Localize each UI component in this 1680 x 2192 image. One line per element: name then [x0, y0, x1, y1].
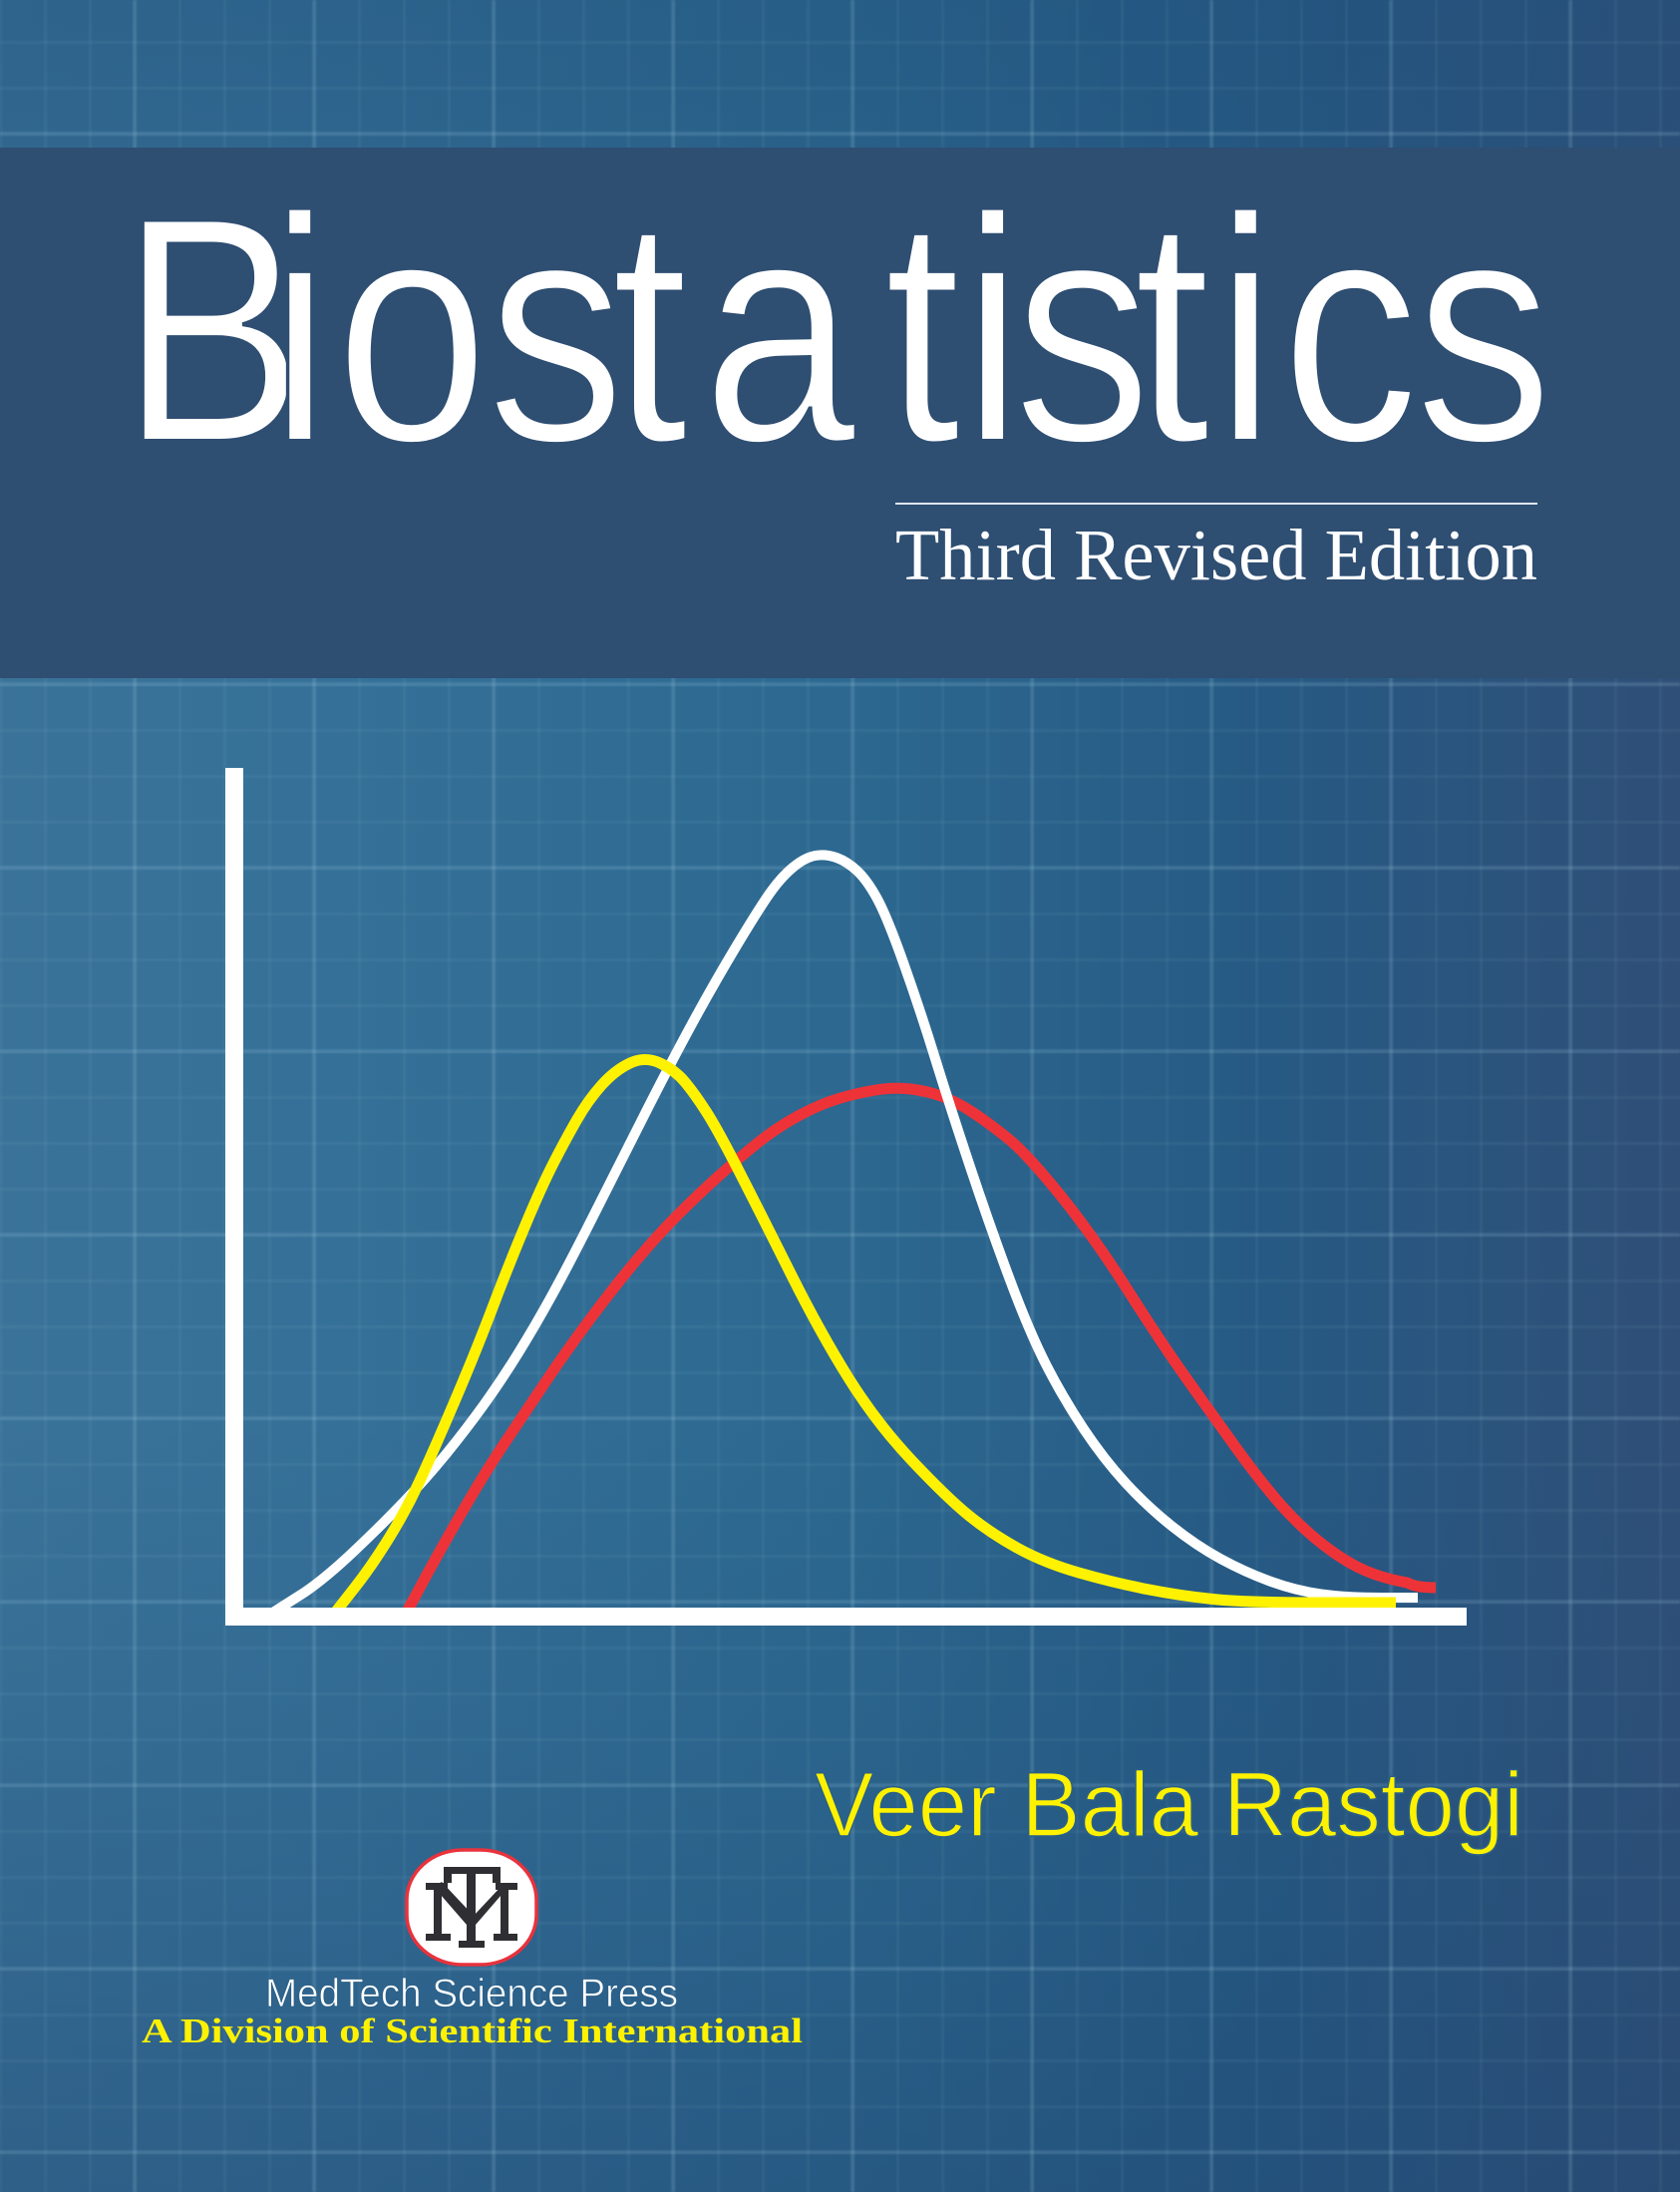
distribution chart: [225, 768, 1467, 1626]
subtitle rule and edition: Third Revised Edition: [895, 515, 1537, 595]
yellow curve: [332, 1059, 1396, 1617]
author name: Veer Bala Rastogi: [815, 1754, 1523, 1856]
title: Biostatistics: [120, 150, 1552, 510]
chart axes: [225, 768, 1467, 1626]
publisher logo: [407, 1850, 536, 1965]
white curve: [271, 855, 1418, 1614]
publisher division: A Division of Scientific International: [142, 2011, 803, 2050]
red curve: [405, 1088, 1436, 1616]
title band: [0, 148, 1680, 678]
publisher name: MedTech Science Press: [265, 1972, 678, 2015]
